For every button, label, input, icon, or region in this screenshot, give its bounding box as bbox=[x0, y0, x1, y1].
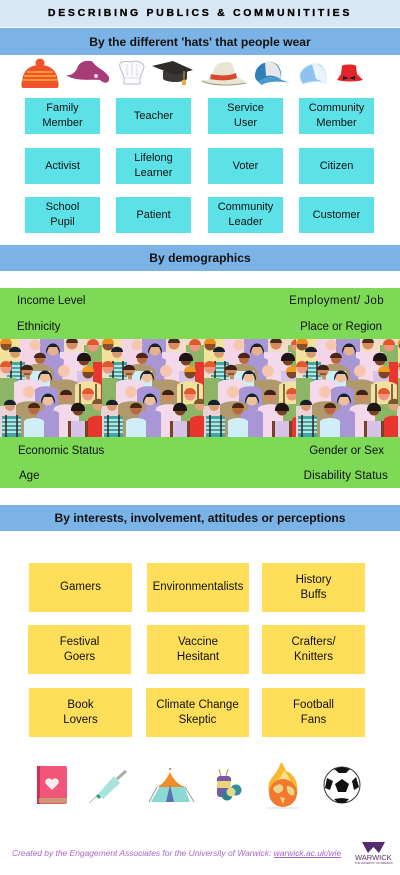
label: Family Member: Member bbox=[42, 117, 83, 129]
label: History Buffs: History bbox=[296, 574, 331, 586]
text: Place or Region: Place or Region bbox=[300, 321, 382, 333]
label: Football Fans: Fans bbox=[301, 714, 326, 726]
logo: Warwick bbox=[355, 842, 393, 865]
label: Crafters/ Knitters: Crafters/ bbox=[291, 636, 336, 648]
text: Ethnicity: Ethnicity bbox=[17, 321, 60, 333]
label: Teacher bbox=[116, 98, 191, 134]
label: Patient bbox=[116, 197, 191, 233]
label: School Pupil: Pupil bbox=[50, 216, 75, 228]
icons: hats bbox=[22, 58, 363, 88]
text: Age: Age bbox=[19, 470, 39, 482]
text: Employment/ Job: Employment/ Job bbox=[289, 295, 384, 307]
label: Vaccine Hesitant: Vaccine bbox=[178, 636, 218, 648]
title banner bbox=[0, 0, 400, 27]
illustration: crowd of people bbox=[0, 339, 400, 437]
label: Family Member bbox=[25, 98, 100, 134]
label: Service User: Service bbox=[227, 102, 264, 114]
text: Gender or Sex: Gender or Sex bbox=[309, 445, 384, 457]
label: Gamers bbox=[29, 563, 132, 612]
heading: interests bbox=[0, 505, 400, 531]
label: Voter: Voter bbox=[233, 160, 258, 172]
label: Lifelong Learner bbox=[116, 148, 191, 184]
logo: Warwick: THE UNIVERSITY OF WARWICK bbox=[355, 862, 393, 865]
label: Activist: Activist bbox=[45, 160, 80, 172]
label: Activist bbox=[25, 148, 100, 184]
label: Environmentalists: Environmentalists bbox=[153, 581, 243, 593]
logo: Warwick: WARWICK bbox=[355, 853, 392, 862]
label: School Pupil: School bbox=[46, 201, 79, 213]
label: Football Fans bbox=[262, 688, 365, 737]
label: Lifelong Learner: Learner bbox=[135, 167, 172, 179]
interest labels grid bbox=[28, 563, 365, 737]
text: Economic Status: Economic Status bbox=[18, 445, 104, 457]
label: Climate Change Skeptic: Skeptic bbox=[179, 714, 216, 726]
label: Crafters/ Knitters bbox=[262, 625, 365, 674]
label: Lifelong Learner: Lifelong bbox=[134, 152, 173, 164]
label: Community Leader bbox=[208, 197, 283, 233]
heading: hats bbox=[0, 28, 400, 55]
label: Environmentalists bbox=[147, 563, 249, 612]
label: Vaccine Hesitant: Hesitant bbox=[177, 650, 219, 662]
label: Service User bbox=[208, 98, 283, 134]
label: Climate Change Skeptic: Climate Change bbox=[156, 698, 239, 710]
icons: interests bbox=[37, 762, 360, 809]
label: History Buffs: Buffs bbox=[300, 588, 326, 600]
label: School Pupil bbox=[25, 197, 100, 233]
label: Voter bbox=[208, 148, 283, 184]
label: Citizen: Citizen bbox=[320, 160, 353, 172]
label: Festival Goers: Festival bbox=[60, 636, 99, 648]
credit line: Created by the Engagement Associates for the University of Warwick: warwick.ac.uk/wie bbox=[12, 848, 341, 858]
label: Patient: Patient bbox=[136, 208, 171, 220]
label: Festival Goers: Goers bbox=[64, 650, 95, 662]
label: Book Lovers: Lovers bbox=[63, 714, 98, 726]
label: Book Lovers: Book bbox=[67, 698, 94, 710]
hat labels grid bbox=[25, 98, 374, 233]
label: Gamers: Gamers bbox=[60, 581, 101, 593]
heading: interests: By interests, involvement, attitudes or perceptions bbox=[54, 511, 346, 525]
label: Community Member bbox=[299, 98, 374, 134]
label: Customer bbox=[299, 197, 374, 233]
label: Family Member: Family bbox=[46, 102, 79, 114]
label: Teacher: Teacher bbox=[134, 110, 173, 122]
label: Service User: User bbox=[234, 117, 257, 129]
heading: demographics: By demographics bbox=[149, 251, 251, 265]
title banner: DESCRIBING PUBLICS & COMMUNITITIES bbox=[48, 7, 352, 19]
label: Customer: Customer bbox=[313, 208, 360, 220]
label: Vaccine Hesitant bbox=[147, 625, 249, 674]
label: Community Leader: Leader bbox=[228, 216, 263, 228]
text: Disability Status: Disability Status bbox=[304, 470, 388, 482]
text: Income Level: Income Level bbox=[17, 295, 85, 307]
label: History Buffs bbox=[262, 563, 365, 612]
panel: demographics bbox=[0, 288, 400, 488]
label: Community Member: Member bbox=[316, 117, 357, 129]
label: Climate Change Skeptic bbox=[146, 688, 249, 737]
heading: hats: By the different 'hats' that people wear bbox=[89, 34, 311, 48]
label: Community Member: Community bbox=[309, 102, 364, 114]
label: Festival Goers bbox=[28, 625, 131, 674]
label: Citizen bbox=[299, 148, 374, 184]
label: Crafters/ Knitters: Knitters bbox=[294, 650, 333, 662]
label: Book Lovers bbox=[29, 688, 132, 737]
heading: demographics bbox=[0, 245, 400, 271]
label: Football Fans: Football bbox=[293, 698, 334, 710]
label: Community Leader: Community bbox=[218, 201, 273, 213]
